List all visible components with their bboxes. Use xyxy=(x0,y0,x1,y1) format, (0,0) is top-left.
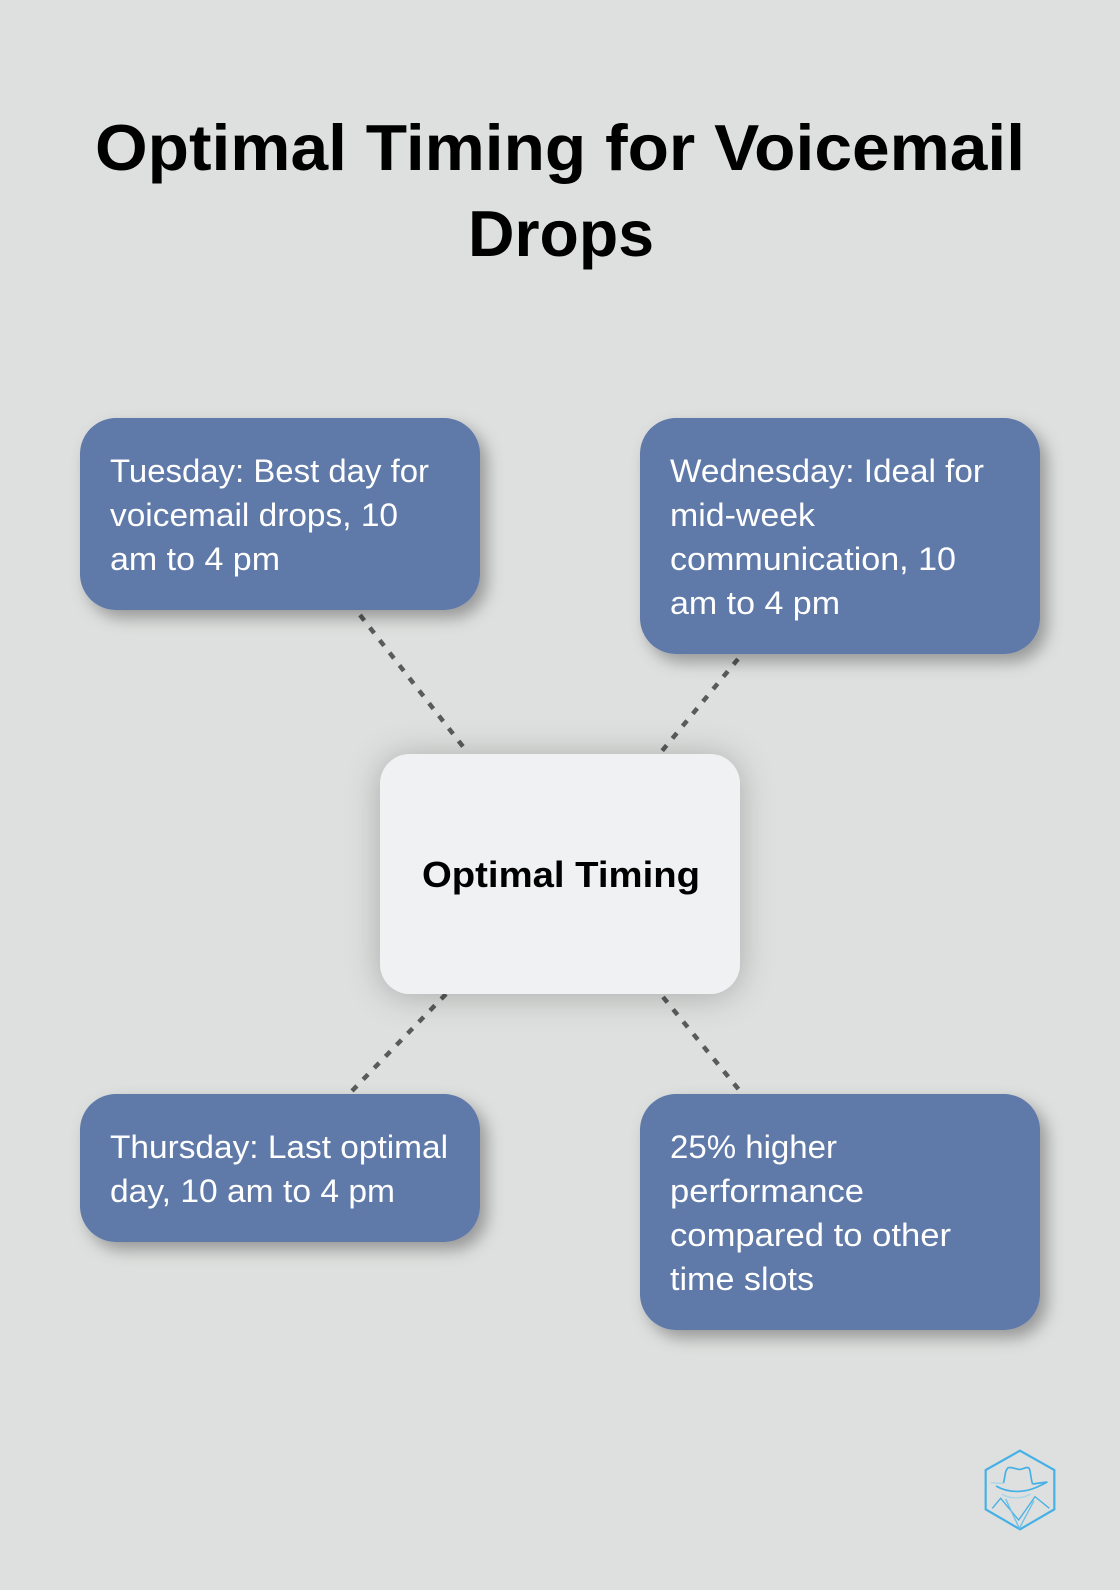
text: performance xyxy=(670,1129,951,1297)
text: performance: time slots xyxy=(670,1261,814,1297)
text: performance: compared to other xyxy=(670,1217,951,1253)
text: Wednesday: Wednesday: Ideal for xyxy=(670,453,984,489)
panel: performance xyxy=(640,1094,1040,1330)
title: Drops xyxy=(468,197,654,270)
text: Thursday xyxy=(110,1129,448,1209)
title xyxy=(95,111,1025,270)
text: Wednesday: communication, 10 xyxy=(670,541,956,577)
text: performance: 25% higher xyxy=(670,1129,837,1165)
text: center label: Optimal Timing xyxy=(422,854,700,895)
text: performance: performance xyxy=(670,1173,864,1209)
text: Thursday: Thursday: Last optimal xyxy=(110,1129,448,1165)
text: Wednesday: am to 4 pm xyxy=(670,585,840,621)
connector: performance to center xyxy=(663,997,740,1091)
panel: Tuesday xyxy=(80,418,480,610)
text: Tuesday: voicemail drops, 10 xyxy=(110,497,398,533)
connector: Tuesday to center xyxy=(360,615,468,753)
panel: center Optimal Timing xyxy=(380,754,740,994)
text: Thursday: day, 10 am to 4 pm xyxy=(110,1173,395,1209)
text: Wednesday: mid-week xyxy=(670,497,816,533)
text: Tuesday xyxy=(110,453,429,577)
connector: Thursday to center xyxy=(349,994,446,1094)
panel: Wednesday xyxy=(640,418,1040,654)
icon: spy logo xyxy=(986,1451,1054,1529)
panel: Thursday xyxy=(80,1094,480,1242)
connector: Wednesday to center xyxy=(662,659,738,751)
title: Optimal Timing for Voicemail xyxy=(95,111,1025,184)
text: Tuesday: am to 4 pm xyxy=(110,541,280,577)
text: Tuesday: Tuesday: Best day for xyxy=(110,453,429,489)
text: Wednesday xyxy=(670,453,984,621)
